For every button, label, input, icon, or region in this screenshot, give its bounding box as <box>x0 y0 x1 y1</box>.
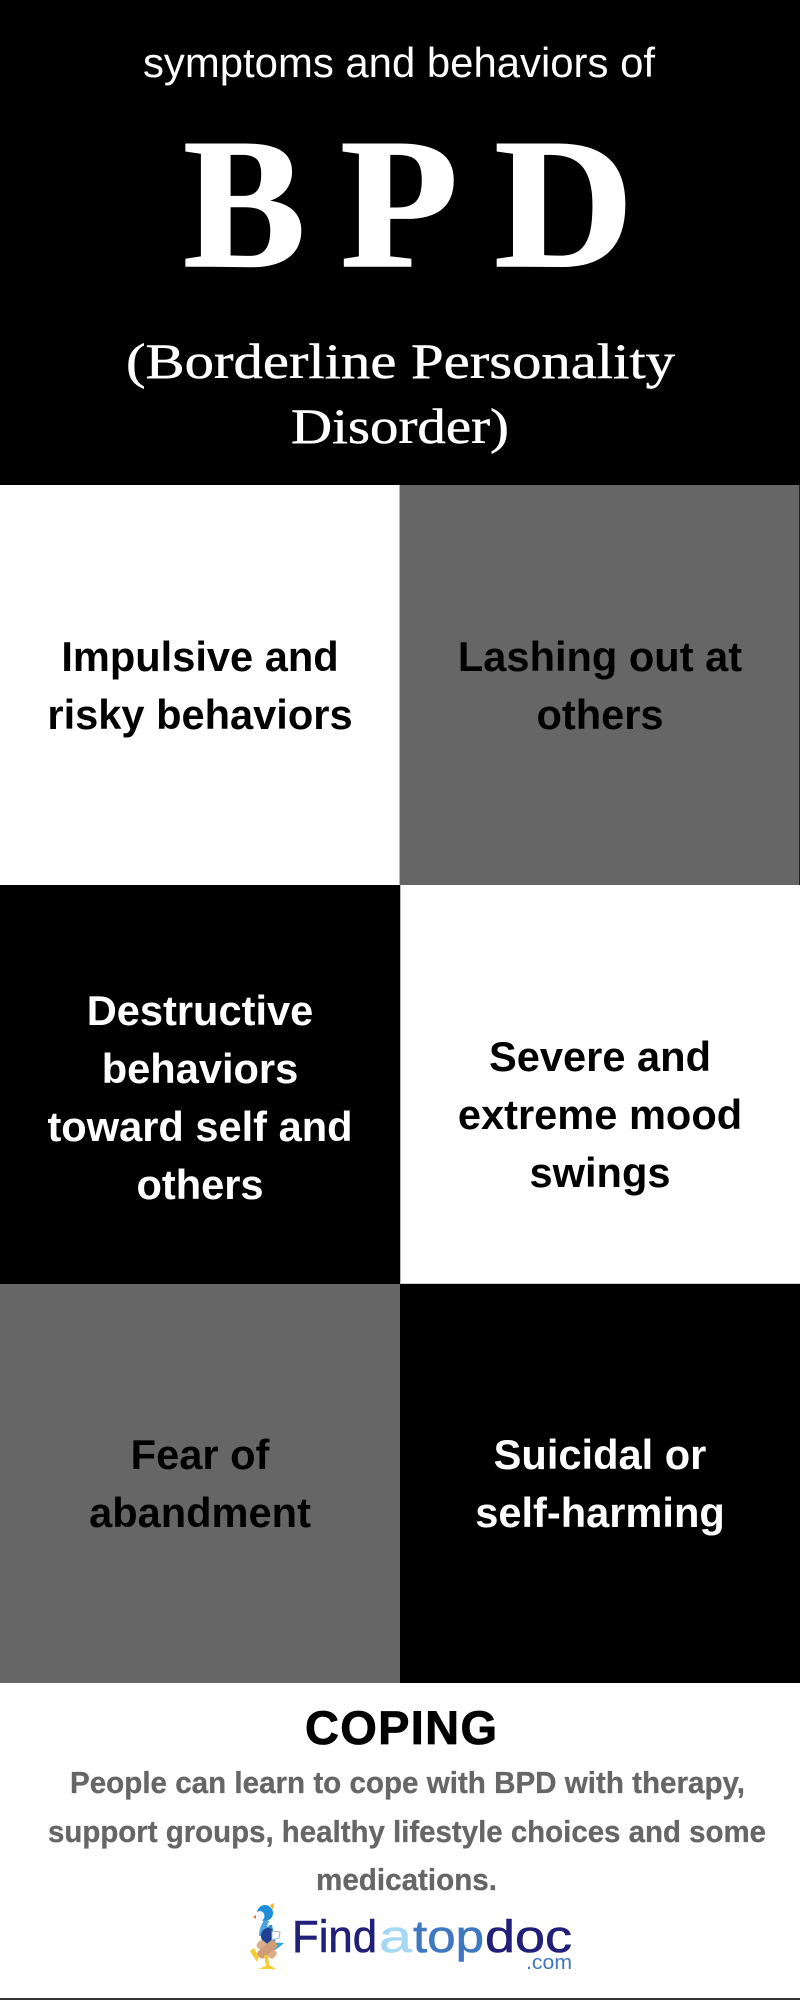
panel: severe mood swings <box>400 885 800 1284</box>
coping text: medications. <box>316 1862 497 1897</box>
panel: destructive behaviors <box>0 885 400 1284</box>
panel: impulsive and risky behaviors: Impulsive and <box>61 633 339 680</box>
header background <box>0 0 800 485</box>
subtitle: Borderline Personality Disorder: (Borderline Personality <box>126 333 675 389</box>
subtitle: Borderline Personality Disorder <box>126 333 675 454</box>
panel: destructive behaviors: toward self and <box>47 1103 353 1150</box>
coping text: People can learn to cope with BPD with therapy, <box>70 1765 745 1800</box>
panel: suicidal or self-harming: Suicidal or <box>494 1431 706 1478</box>
panel: destructive behaviors: Destructive <box>87 987 313 1034</box>
heading: symptoms and behaviors of: symptoms and behaviors of <box>143 39 655 86</box>
subtitle: Borderline Personality Disorder: Disorder) <box>291 398 509 454</box>
title: BPD <box>183 101 634 307</box>
panel: severe mood swings: Severe and <box>489 1033 711 1080</box>
logo: Findatopdoc <box>250 1903 572 1974</box>
title: BPD: D <box>494 102 634 307</box>
logo wordmark: top <box>413 1911 484 1962</box>
panel: severe mood swings: swings <box>530 1149 670 1196</box>
logo wordmark: .com <box>526 1952 572 1974</box>
panel: fear of abandonment: Fear of <box>131 1431 269 1478</box>
panel: impulsive and risky behaviors <box>0 485 400 885</box>
logo wordmark: doc <box>485 1911 572 1962</box>
panel: header <box>0 0 800 485</box>
panel: destructive behaviors: behaviors <box>102 1045 298 1092</box>
panel: suicidal or self-harming <box>400 1284 800 1683</box>
panel: lashing out at others: Lashing out at <box>458 633 742 680</box>
panel: coping <box>0 1683 800 1998</box>
icon: duck mascot with bandage <box>250 1903 284 1969</box>
title: BPD: P <box>340 102 459 307</box>
panel: lashing out at others <box>400 485 800 885</box>
panel: fear of abandonment <box>0 1284 400 1683</box>
logo wordmark: Find <box>292 1911 377 1962</box>
panel: destructive behaviors: others <box>136 1161 264 1208</box>
panel: fear of abandonment: abandment <box>89 1489 311 1536</box>
logo wordmark <box>292 1911 572 1974</box>
title: BPD: B <box>183 101 306 307</box>
panel: severe mood swings: extreme mood <box>458 1091 742 1138</box>
coping text: support groups, healthy lifestyle choices and some <box>48 1814 766 1849</box>
coping text <box>48 1765 766 1897</box>
logo wordmark: a <box>379 1911 413 1962</box>
panel: suicidal or self-harming: self-harming <box>475 1489 725 1536</box>
panel: lashing out at others: others <box>536 691 664 738</box>
heading: coping: COPING <box>305 1701 497 1754</box>
panel: impulsive and risky behaviors: risky behaviors <box>47 691 353 738</box>
